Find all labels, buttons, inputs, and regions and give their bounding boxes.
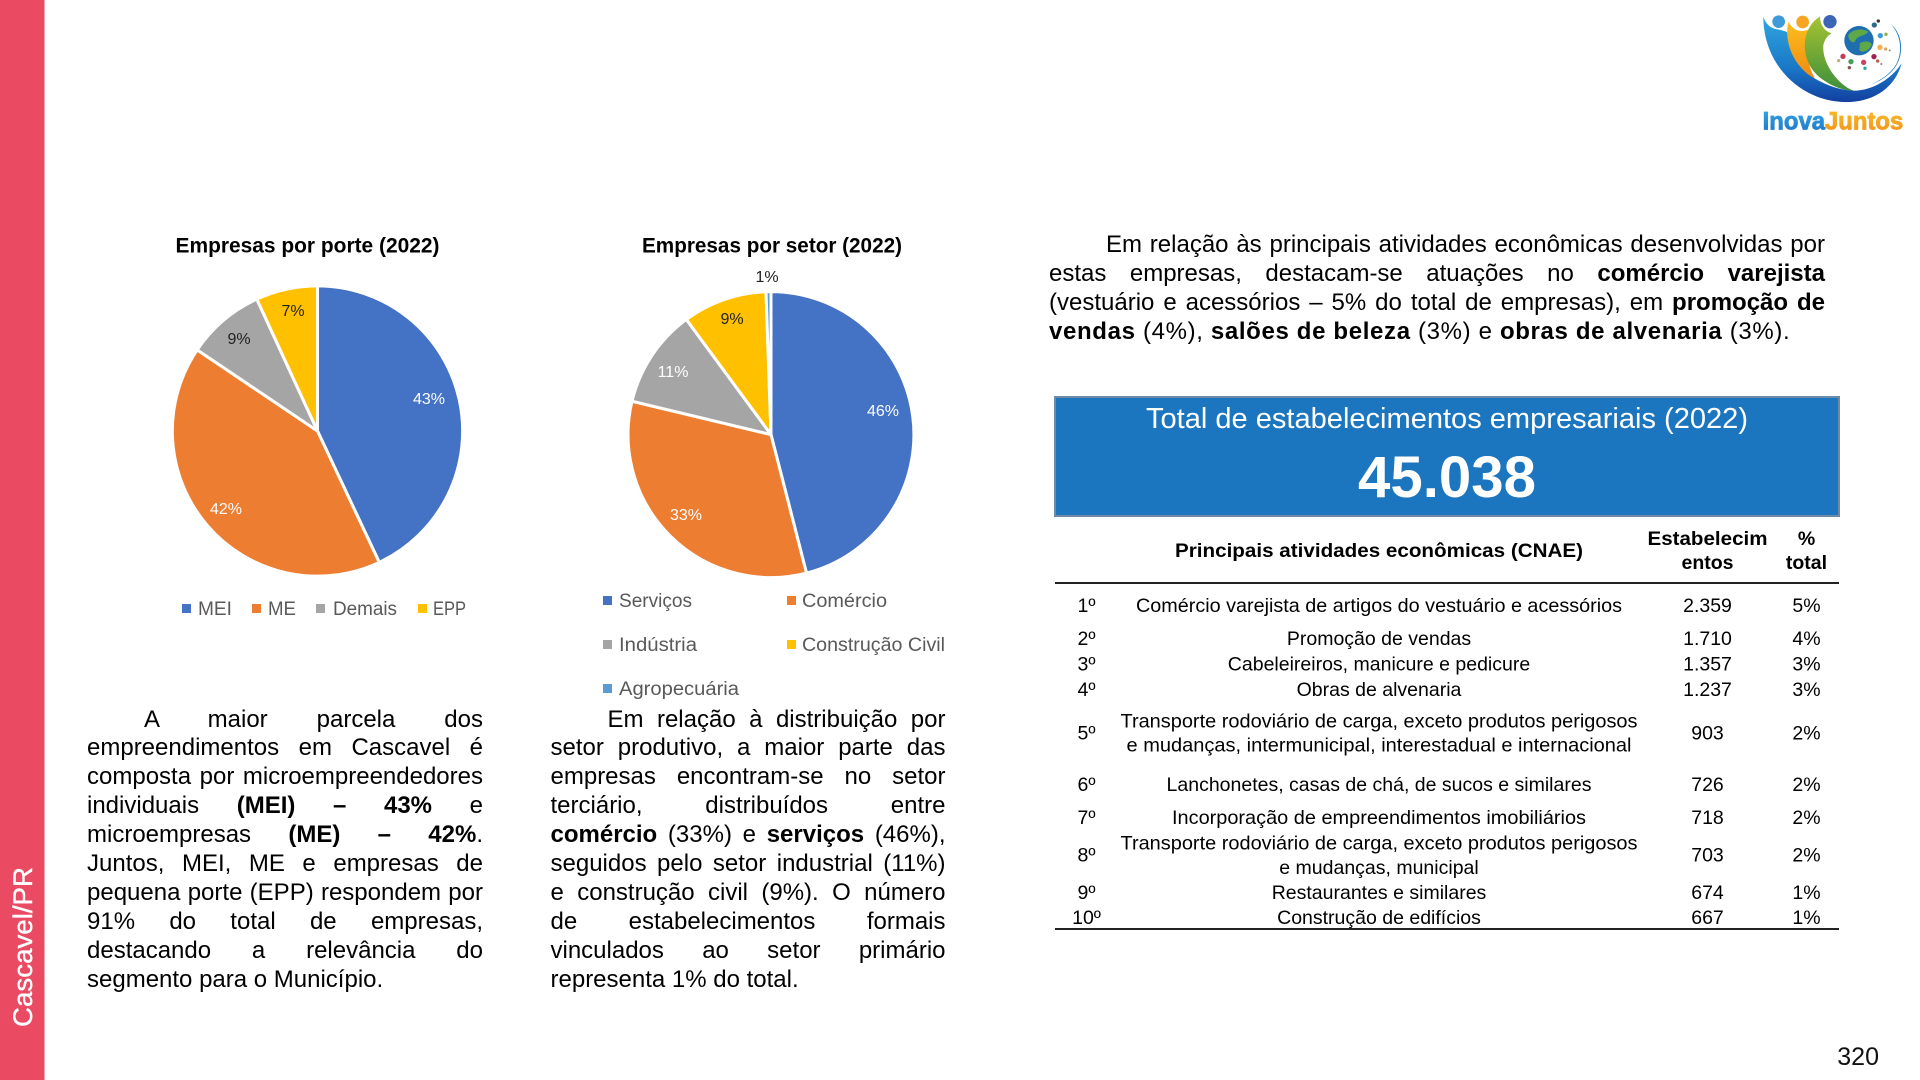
- row 6: Lanchonetes, casas de chá, de sucos e similares: [1167, 774, 1592, 796]
- sidebar: [0, 0, 44, 1080]
- text block: porte: segmento para o Município.: [87, 966, 383, 993]
- row 2: [1078, 628, 1821, 650]
- total banner: [1055, 397, 1839, 516]
- row 7: 7º: [1078, 807, 1095, 829]
- text block: setor: comércio (33%) e serviços (46%),: [550, 821, 946, 848]
- row 9: 674: [1691, 882, 1724, 904]
- row 5: e mudanças, intermunicipal, interestadual e internacional: [1126, 734, 1632, 756]
- text block: porte: destacando a relevância do: [87, 937, 483, 964]
- row 6: 2%: [1792, 774, 1821, 796]
- text block: porte: [87, 706, 483, 993]
- text block: setor: de estabelecimentos formais: [550, 908, 946, 935]
- sidebar label: Cascavel/PR: [8, 867, 38, 1027]
- text block: setor: terciário, distribuídos entre: [550, 792, 946, 819]
- row 7: [1078, 807, 1821, 829]
- row 8: e mudanças, municipal: [1279, 857, 1479, 879]
- row 3: Cabeleireiros, manicure e pedicure: [1228, 654, 1530, 676]
- row 8: [1078, 832, 1821, 879]
- banner number: 45.038: [1358, 445, 1536, 510]
- row 8: 703: [1691, 844, 1724, 866]
- row 6: 6º: [1078, 774, 1095, 796]
- text block: atividades: estas empresas, destacam-se atuações no comércio varejista: [1049, 260, 1825, 287]
- row 9: 9º: [1078, 882, 1095, 904]
- text block: setor: representa 1% do total.: [550, 966, 799, 993]
- pie chart: Empresas por porte: 7%: [281, 303, 305, 320]
- legend: ME: [268, 599, 296, 620]
- row 10: 667: [1691, 907, 1724, 929]
- text block: setor: Em relação à distribuição por: [608, 706, 946, 732]
- text block: porte: empreendimentos em Cascavel é: [87, 734, 483, 761]
- pie chart: Empresas por porte: 9%: [227, 331, 251, 348]
- table header: total: [1786, 552, 1827, 574]
- pie chart: Empresas por setor: 33%: [670, 507, 702, 524]
- legend: Comércio: [802, 591, 887, 612]
- row 1: [1078, 595, 1821, 617]
- pie chart: Empresas por setor: 11%: [658, 364, 688, 381]
- row 5: 2%: [1792, 722, 1821, 744]
- row 3: 1.357: [1683, 654, 1732, 676]
- table header: Estabelecim: [1648, 528, 1768, 550]
- row 1: 2.359: [1683, 595, 1732, 617]
- row 9: Restaurantes e similares: [1272, 882, 1487, 904]
- text block: setor: seguidos pelo setor industrial (11%): [550, 850, 946, 877]
- text block: setor: e construção civil (9%). O número: [550, 879, 946, 906]
- pie chart: Empresas por porte: 42%: [210, 501, 242, 518]
- row 10: [1072, 907, 1821, 929]
- row 3: 3º: [1078, 654, 1095, 676]
- row 7: 718: [1691, 807, 1724, 829]
- legend: EPP: [433, 599, 466, 620]
- row 2: 4%: [1792, 628, 1821, 650]
- row 6: [1078, 774, 1821, 796]
- row 5: 903: [1691, 722, 1724, 744]
- text block: porte: microempresas (ME) – 42%.: [87, 821, 483, 848]
- row 5: 5º: [1078, 722, 1095, 744]
- row 7: Incorporação de empreendimentos imobiliários: [1172, 807, 1586, 829]
- legend: Indústria: [619, 635, 697, 656]
- row 3: 3%: [1792, 654, 1821, 676]
- text block: setor: [550, 706, 946, 993]
- row 9: 1%: [1792, 882, 1821, 904]
- row 8: 2%: [1792, 844, 1821, 866]
- pie chart: Empresas por setor: [603, 234, 945, 700]
- row 8: 8º: [1078, 844, 1095, 866]
- text block: porte: pequena porte (EPP) respondem por: [87, 879, 483, 906]
- row 4: Obras de alvenaria: [1297, 679, 1462, 701]
- text block: atividades: Em relação às principais atividades econômicas desenvolvidas por: [1106, 231, 1825, 258]
- row 5: Transporte rodoviário de carga, exceto produtos perigosos: [1120, 710, 1638, 732]
- legend: [603, 591, 945, 700]
- text block: porte: Juntos, MEI, ME e empresas de: [87, 850, 483, 877]
- text block: atividades: (vestuário e acessórios – 5% do total de empresas), em promoção de: [1049, 289, 1825, 316]
- row 3: [1078, 654, 1821, 676]
- page number: 320: [1837, 1043, 1879, 1071]
- chart title: Empresas por setor (2022): [642, 234, 902, 258]
- row 10: Construção de edifícios: [1277, 907, 1481, 929]
- table header: Principais atividades econômicas (CNAE): [1175, 540, 1583, 562]
- table: principais atividades: [1055, 528, 1839, 930]
- row 6: 726: [1691, 774, 1724, 796]
- row 4: 3%: [1792, 679, 1821, 701]
- row 4: 4º: [1078, 679, 1095, 701]
- table header: [1175, 528, 1827, 574]
- legend: Demais: [333, 599, 397, 620]
- text block: porte: A maior parcela dos: [144, 706, 483, 732]
- text block: atividades: vendas (4%), salões de beleza (3%) e obras de alvenaria (3%).: [1049, 318, 1790, 345]
- logo wordmark: InovaJuntos: [1763, 107, 1903, 135]
- table header: entos: [1681, 552, 1734, 574]
- row 2: Promoção de vendas: [1287, 628, 1471, 650]
- table header: %: [1798, 528, 1815, 550]
- row 4: [1078, 679, 1821, 701]
- legend: Agropecuária: [619, 679, 739, 700]
- logo: InovaJuntos: [1763, 15, 1903, 135]
- pie chart: Empresas por setor: 9%: [720, 311, 744, 328]
- text block: porte: 91% do total de empresas,: [87, 908, 483, 935]
- text block: porte: individuais (MEI) – 43% e: [87, 792, 483, 819]
- row 8: Transporte rodoviário de carga, exceto produtos perigosos: [1120, 832, 1638, 854]
- row 10: 10º: [1072, 907, 1101, 929]
- row 5: [1078, 710, 1821, 756]
- legend: MEI: [198, 599, 232, 620]
- pie chart: Empresas por setor: 46%: [867, 403, 899, 420]
- text block: porte: composta por microempreendedores: [87, 763, 483, 790]
- pie chart: Empresas por porte: [172, 234, 466, 620]
- legend: Serviços: [619, 591, 692, 612]
- text block: setor: setor produtivo, a maior parte das: [550, 734, 946, 761]
- text block: atividades: [1049, 231, 1826, 345]
- row 7: 2%: [1792, 807, 1821, 829]
- chart title: Empresas por porte (2022): [176, 234, 440, 258]
- row 10: 1%: [1792, 907, 1821, 929]
- legend: [182, 599, 466, 620]
- row 2: 2º: [1078, 628, 1095, 650]
- row 2: 1.710: [1683, 628, 1732, 650]
- row 1: 1º: [1078, 595, 1095, 617]
- legend: Construção Civil: [802, 635, 945, 656]
- banner title: Total de estabelecimentos empresariais (2022): [1146, 403, 1748, 435]
- row 1: Comércio varejista de artigos do vestuário e acessórios: [1136, 595, 1622, 617]
- text block: setor: empresas encontram-se no setor: [550, 763, 946, 790]
- row 4: 1.237: [1683, 679, 1732, 701]
- pie chart: Empresas por porte: 43%: [413, 391, 445, 408]
- text block: setor: vinculados ao setor primário: [550, 937, 946, 964]
- row 1: 5%: [1792, 595, 1821, 617]
- pie chart: Empresas por setor: 1%: [755, 269, 779, 286]
- row 9: [1078, 882, 1821, 904]
